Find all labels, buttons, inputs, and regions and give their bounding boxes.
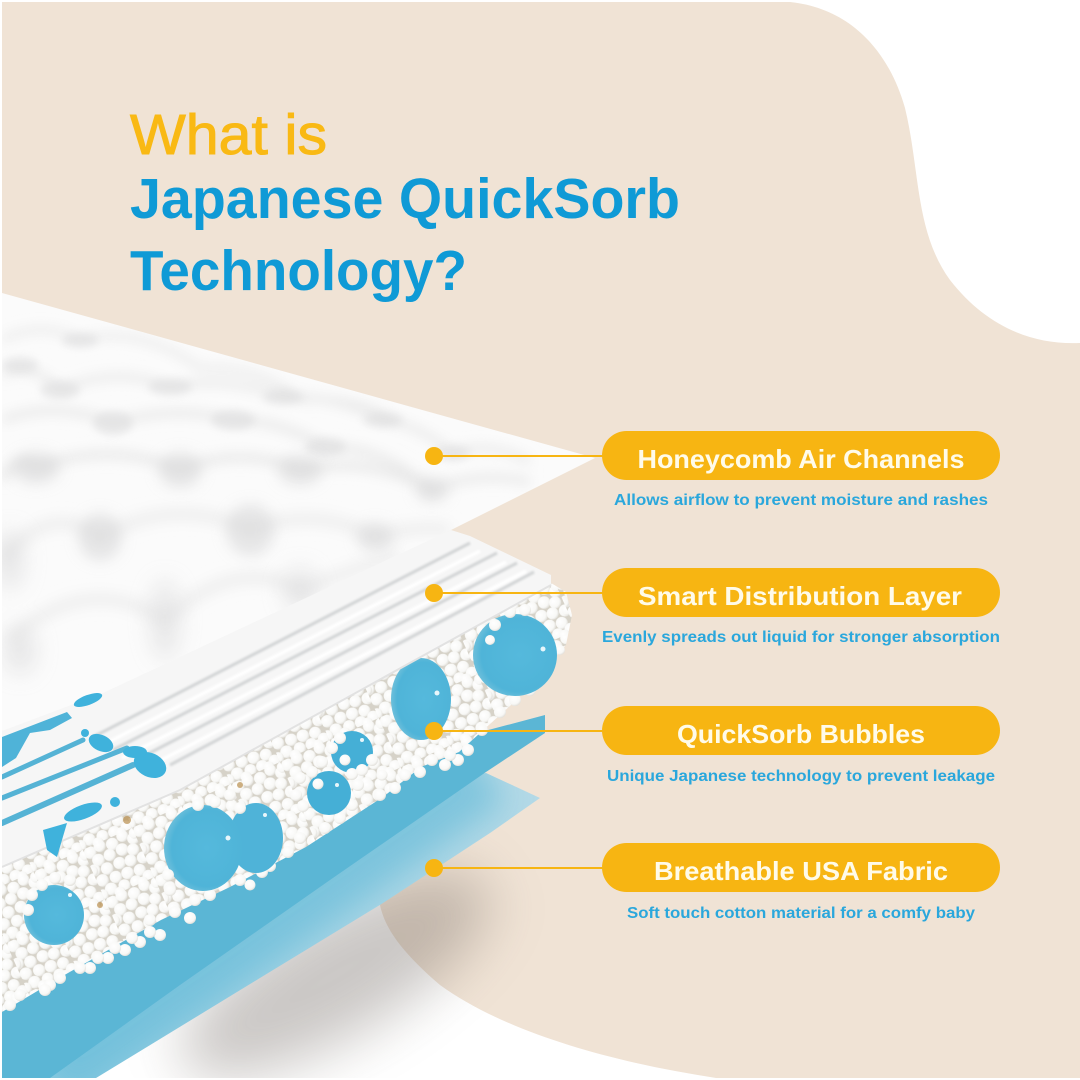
pill label xyxy=(602,706,1000,755)
bubble: far left xyxy=(24,885,84,945)
loose granules along lower edge xyxy=(4,645,565,1011)
pill label xyxy=(602,431,1000,480)
product layers illustration xyxy=(0,293,595,1078)
layer: honeycomb top sheet xyxy=(0,293,595,731)
granules over centre bubbles xyxy=(290,732,388,812)
pill label xyxy=(602,843,1000,892)
description: Allows airflow to prevent moisture and rashes xyxy=(614,492,988,509)
bubble: left middle pair xyxy=(164,803,283,891)
callout: Breathable USA Fabric xyxy=(425,843,1000,922)
callout: Honeycomb Air Channels xyxy=(425,431,1000,509)
title line 1: What is xyxy=(130,103,327,167)
layer: granule bed xyxy=(2,583,572,1012)
callout: QuickSorb Bubbles xyxy=(425,706,1000,785)
pill label: QuickSorb Bubbles xyxy=(677,719,925,749)
marker and leader line xyxy=(425,447,604,465)
layer: ribbed distribution sheet xyxy=(2,530,551,867)
pill label: Breathable USA Fabric xyxy=(654,856,948,886)
marker and leader line xyxy=(425,722,604,740)
title line 3: Technology? xyxy=(130,239,467,303)
description: Unique Japanese technology to prevent leakage xyxy=(607,768,995,785)
brown gaps in bed xyxy=(97,782,243,908)
honeycomb ridges and dimple shadows xyxy=(0,330,530,674)
liquid stains on ribbed layer xyxy=(2,690,170,857)
description: Evenly spreads out liquid for stronger absorption xyxy=(602,629,1000,646)
granules around left bubbles xyxy=(22,604,531,916)
product shadow xyxy=(159,852,508,1078)
pill label: Honeycomb Air Channels xyxy=(638,444,964,474)
pill label xyxy=(602,568,1000,617)
bubble: second from right xyxy=(391,658,451,740)
layer: blue fabric xyxy=(0,715,545,1078)
bubble: far right xyxy=(473,614,557,696)
description: Soft touch cotton material for a comfy baby xyxy=(627,905,975,922)
pill label: Smart Distribution Layer xyxy=(638,581,962,611)
marker and leader line xyxy=(425,859,604,877)
title xyxy=(130,103,680,303)
layer: light blue fabric sheet xyxy=(30,773,540,1078)
title line 2: Japanese QuickSorb xyxy=(130,167,680,231)
callout: Smart Distribution Layer xyxy=(425,568,1000,646)
ribs xyxy=(93,543,534,765)
rib highlights xyxy=(509,572,524,580)
sheet underside edge xyxy=(2,585,551,867)
blended fold of fabric xyxy=(50,772,486,1078)
marker and leader line xyxy=(425,584,604,602)
bubble: small centre pair xyxy=(307,731,373,815)
